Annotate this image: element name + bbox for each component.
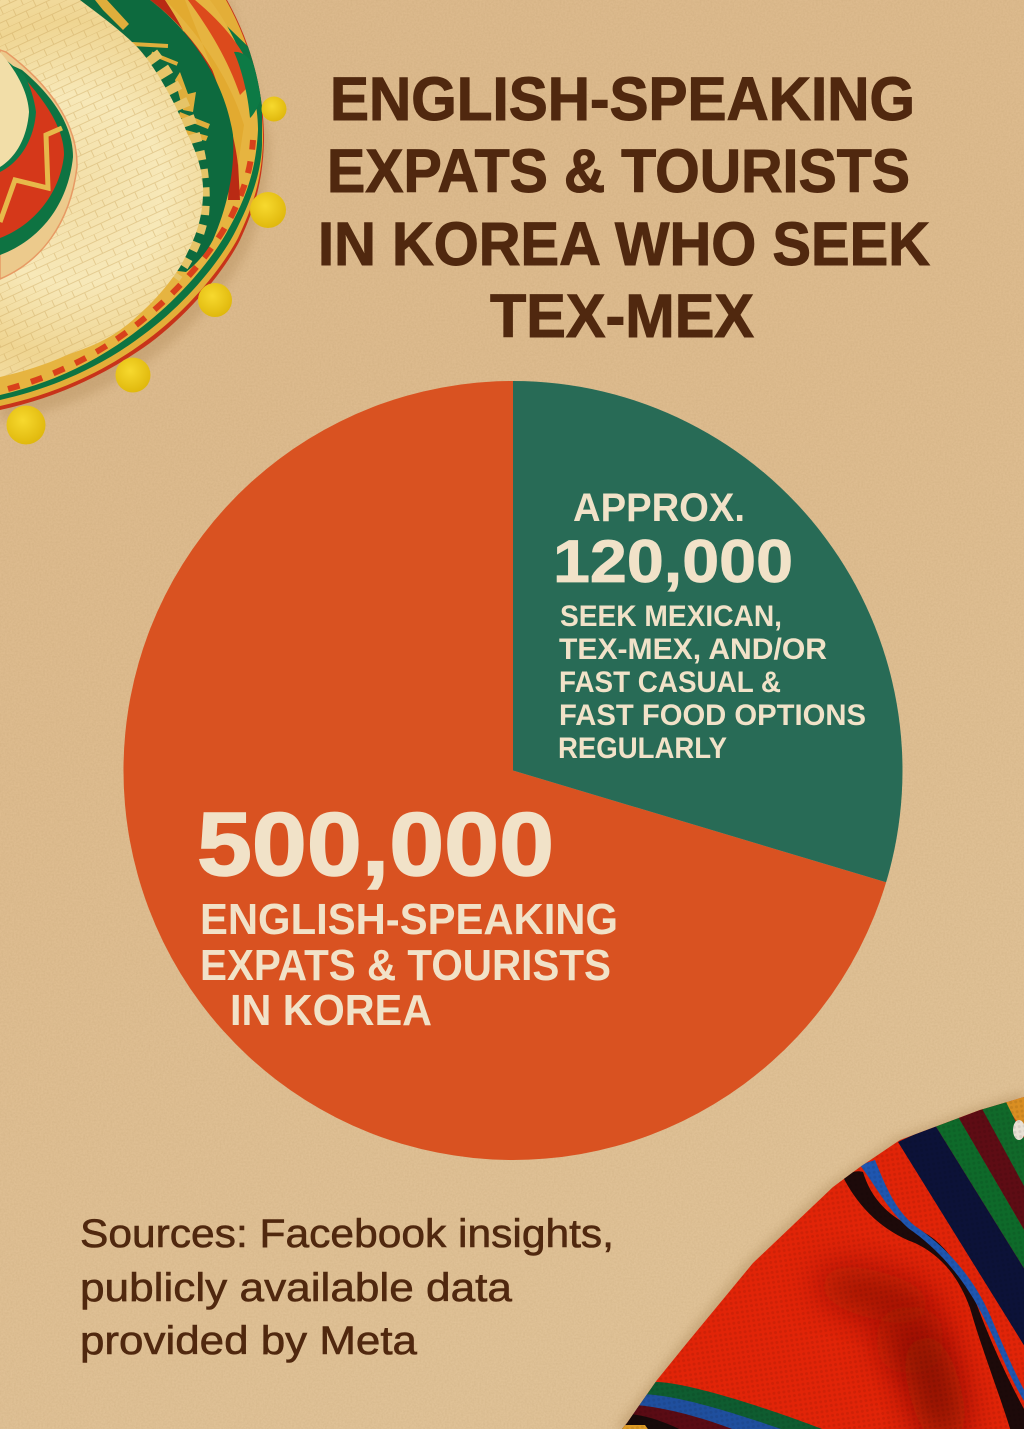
label: 500,000 [197,795,618,1035]
illustration: sombrero [0,0,290,444]
pom-poms [6,96,286,444]
title [318,65,930,350]
pie slice: 120,000 [513,381,902,882]
gold outer cord [0,0,263,406]
brim [0,0,264,410]
black stripe [843,1171,1024,1429]
sources: Sources: Facebook insights, [80,1212,614,1256]
label: 120,000: TEX-MEX, AND/OR [559,633,827,666]
label: 120,000: APPROX. [573,486,745,530]
title: IN KOREA WHO SEEK [318,210,930,278]
label: 500,000: EXPATS & TOURISTS [200,941,611,990]
label: 500,000: IN KOREA [230,986,432,1035]
blue stripe [860,1160,1024,1410]
illustration: serape blanket [615,1090,1024,1429]
title: ENGLISH-SPEAKING [330,65,915,133]
label: 500,000: ENGLISH-SPEAKING [200,895,618,944]
label: 120,000: FAST CASUAL & [559,666,781,699]
sources [80,1212,614,1363]
label: 120,000: REGULARLY [558,732,727,765]
red and gold cords at top [150,0,240,200]
corner stripes [1002,1097,1024,1124]
title: EXPATS & TOURISTS [327,137,910,205]
green embroidered band [70,0,233,272]
crown band [0,60,73,255]
straw interior [0,0,203,377]
pie slice: 500,000 total [123,381,886,1160]
sources: provided by Meta [80,1319,418,1363]
embroidered band [0,0,258,395]
thin green line [0,0,262,400]
label: 120,000: 120,000 [553,528,793,595]
bottom stripes [625,1382,830,1429]
crown ring [0,50,77,279]
gold motifs [95,0,210,141]
label: 500,000: 500,000 [197,795,554,895]
crown zigzag [0,128,62,222]
fold shadows [811,1256,939,1334]
title: TEX-MEX [490,282,754,350]
label: 120,000: SEEK MEXICAN, [560,600,782,633]
label: 120,000: FAST FOOD OPTIONS [559,699,866,732]
hat shadow [0,0,270,422]
pie chart [123,381,902,1160]
sources: publicly available data [80,1266,513,1310]
label: 120,000 [553,486,866,765]
green knob [234,52,263,118]
